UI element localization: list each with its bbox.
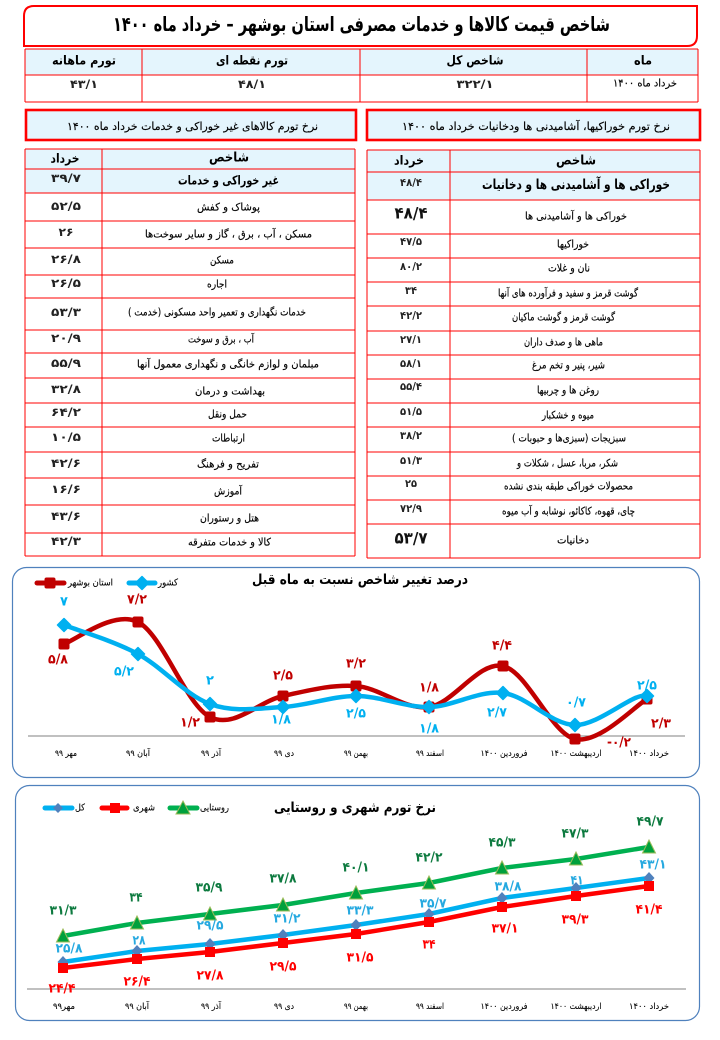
data labels: total: ۳۳/۳ (346, 904, 374, 918)
x axis labels: اردیبهشت ۱۴۰۰ (550, 749, 602, 759)
table: food, beverages and tobacco: شکر، مربا، عسل ، شکلات و (516, 458, 618, 470)
table: food, beverages and tobacco: محصولات خوراکی طبقه بندی نشده (504, 480, 633, 492)
table: non-food goods and services: کالا و خدمات متفرقه (188, 536, 271, 548)
heading: non-food inflation (26, 110, 356, 140)
data labels: total: ۳۱/۲ (274, 912, 301, 926)
x axis labels: فروردین ۱۴۰۰ (481, 1002, 528, 1012)
table: food, beverages and tobacco: ۵۸/۱ (400, 358, 422, 370)
summary table: ۴۳/۱ (70, 77, 98, 91)
axis line (28, 735, 685, 737)
table: non-food goods and services: مسکن ، آب ، برق ، گاز و سایر سوخت‌ها (145, 228, 312, 240)
data labels: Bushehr province (48, 592, 671, 750)
x axis labels: آبان ۹۹ (125, 1000, 150, 1012)
data labels: rural: ۳۱/۳ (50, 904, 77, 918)
table: non-food goods and services: اجاره (207, 278, 227, 290)
data labels: urban: ۲۶/۴ (124, 974, 151, 990)
table: non-food goods and services: ۴۲/۳ (51, 534, 81, 548)
table: non-food goods and services: ۲۶/۸ (51, 252, 81, 266)
table: food, beverages and tobacco: ۴۲/۲ (400, 310, 423, 322)
data labels: rural: ۴۹/۷ (636, 814, 664, 830)
data labels: Bushehr province: ۳/۲ (346, 656, 366, 672)
data labels: country: ۱/۸ (419, 722, 439, 736)
x axis labels: خرداد ۱۴۰۰ (629, 749, 669, 759)
table: food, beverages and tobacco: نان و غلات (548, 262, 590, 274)
summary table: خرداد ماه ۱۴۰۰ (613, 78, 677, 90)
table: non-food goods and services: غیر خوراکی و خدمات (178, 172, 279, 188)
x axis labels: بهمن ۹۹ (344, 749, 368, 759)
table: food, beverages and tobacco: ۲۵ (405, 478, 418, 490)
data labels: total: ۲۸ (132, 934, 146, 948)
table: food, beverages and tobacco: ۵۱/۳ (400, 455, 423, 467)
line: total (58, 872, 654, 968)
table: food, beverages and tobacco: چای، قهوه، کاکائو، نوشابه و آب میوه (502, 504, 635, 518)
table: non-food goods and services: ۶۴/۲ (51, 405, 81, 419)
table: non-food goods and services: هتل و رستوران (200, 512, 259, 524)
data labels: Bushehr province: ۵/۸ (48, 652, 68, 668)
data labels: Bushehr province: ۴/۴ (492, 638, 512, 654)
table: non-food goods and services: خدمات نگهداری و تعمیر واحد مسکونی (خدمت ) (128, 306, 306, 318)
data labels: country: ۰/۷ (566, 696, 586, 710)
table: non-food goods and services: تفریح و فرهنگ (197, 458, 259, 470)
table: non-food goods and services: ۴۳/۶ (51, 509, 81, 523)
table: non-food goods and services: بهداشت و درمان (195, 386, 265, 398)
data labels: urban: ۴۱/۴ (636, 902, 663, 918)
chart title: نرخ تورم شهری و روستایی (274, 800, 436, 816)
line: country (58, 618, 654, 732)
x axis labels: مهر۹۹ (53, 1002, 75, 1012)
line: rural (56, 840, 656, 942)
x axis labels: آذر ۹۹ (201, 1000, 222, 1012)
table: food, beverages and tobacco: خرداد (394, 152, 424, 168)
data labels: total: ۲۹/۵ (196, 918, 224, 934)
summary table: تورم نقطه ای (216, 52, 288, 68)
table: food, beverages and tobacco: خوراکی ها و آشامیدنی ها (525, 210, 627, 222)
x axis labels: اردیبهشت ۱۴۰۰ (550, 1002, 602, 1012)
table: non-food goods and services: ۲۶ (58, 225, 74, 239)
table: non-food goods and services: ۵۳/۳ (51, 305, 81, 319)
legend: استان بوشهر (67, 578, 113, 588)
table: non-food goods and services: آموزش (214, 484, 243, 498)
table: food, beverages and tobacco: ۲۷/۱ (400, 334, 422, 346)
data labels: rural: ۴۵/۳ (488, 836, 516, 850)
data labels: country (60, 594, 657, 736)
data labels: total: ۲۵/۸ (56, 942, 83, 956)
data labels: rural: ۳۴ (130, 890, 143, 906)
heading: food inflation: نرخ تورم خوراکیها، آشامیدنی ها ودخانیات خرداد ماه ۱۴۰۰ (402, 119, 670, 133)
summary table: تورم ماهانه (52, 52, 116, 68)
x axis labels: خرداد ۱۴۰۰ (629, 1002, 669, 1012)
table: food, beverages and tobacco: روغن ها و چربیها (537, 384, 599, 396)
data labels: country: ۲/۵ (346, 706, 366, 722)
line: Bushehr province (58, 616, 652, 744)
data labels: Bushehr province: ۲/۵ (273, 668, 293, 684)
table: food, beverages and tobacco: میوه و خشکبار (541, 410, 594, 422)
data labels: country: ۲/۷ (487, 706, 507, 720)
x axis labels: فروردین ۱۴۰۰ (481, 749, 528, 759)
data labels: total: ۳۵/۷ (420, 896, 447, 912)
table: food, beverages and tobacco: سبزیجات (سبزی‌ها و حبوبات ) (512, 432, 626, 444)
data labels: rural: ۴۷/۳ (562, 826, 589, 842)
legend: کشور (157, 578, 178, 588)
table: non-food goods and services: ۵۲/۵ (51, 199, 81, 213)
data labels: urban: ۲۹/۵ (270, 960, 297, 974)
data labels: rural: ۴۰/۱ (342, 860, 370, 876)
data labels: rural: ۳۷/۸ (270, 872, 297, 886)
summary table (25, 49, 698, 102)
data labels: total (56, 858, 666, 956)
legend: روستایی (200, 802, 229, 814)
data labels: Bushehr province: ۷/۲ (127, 592, 147, 608)
data labels: rural: ۳۵/۹ (196, 880, 223, 896)
panel: urban and rural inflation line chart (16, 786, 700, 1020)
table: non-food goods and services: پوشاک و کفش (197, 202, 260, 214)
table: non-food goods and services: ۲۰/۹ (51, 331, 81, 345)
data labels: country: ۵/۲ (114, 664, 134, 680)
data labels: urban (48, 902, 663, 996)
table: food, beverages and tobacco: ۵۵/۴ (400, 381, 423, 393)
line: urban (58, 881, 654, 973)
legend (45, 801, 229, 814)
data labels: urban: ۲۴/۴ (48, 982, 76, 996)
table: non-food goods and services: مسکن (210, 254, 234, 266)
heading: non-food inflation: نرخ تورم کالاهای غیر خوراکی و خدمات خرداد ماه ۱۴۰۰ (67, 120, 318, 133)
data labels: urban: ۲۷/۸ (196, 968, 224, 984)
data labels: Bushehr province: -۰/۲ (607, 736, 631, 750)
x axis labels: اسفند ۹۹ (416, 749, 444, 759)
data labels: Bushehr province: ۱/۸ (419, 680, 439, 696)
table: food, beverages and tobacco: ۴۸/۴ (394, 204, 428, 222)
data labels: rural: ۴۲/۲ (416, 850, 443, 866)
table: food, beverages and tobacco: ۷۲/۹ (400, 503, 423, 515)
table: food, beverages and tobacco: ۴۷/۵ (400, 236, 423, 248)
table: non-food goods and services: مبلمان و لوازم خانگی و نگهداری معمول آنها (137, 358, 319, 370)
table: food, beverages and tobacco (367, 150, 700, 558)
x axis labels: آذر ۹۹ (201, 747, 222, 759)
summary table: شاخص کل (446, 52, 504, 68)
legend (37, 576, 178, 590)
data labels: total: ۴۱ (570, 874, 584, 888)
table: non-food goods and services: ۱۰/۵ (51, 430, 81, 444)
heading: food inflation (367, 110, 700, 140)
table: food, beverages and tobacco: ۸۰/۲ (400, 261, 423, 273)
table: non-food goods and services: ۱۶/۶ (51, 482, 81, 496)
x axis labels (53, 1000, 669, 1012)
table: food, beverages and tobacco: ۳۴ (405, 285, 418, 297)
title banner (24, 6, 697, 46)
table: non-food goods and services: ۵۵/۹ (51, 356, 81, 370)
table: food, beverages and tobacco: ۳۸/۲ (400, 430, 423, 442)
table: non-food goods and services: ۳۹/۷ (51, 171, 81, 185)
data labels: country: ۱/۸ (271, 712, 291, 728)
x axis labels: دی ۹۹ (274, 749, 294, 759)
table: non-food goods and services: ۴۲/۶ (51, 456, 81, 470)
data labels: country: ۲/۵ (637, 678, 657, 694)
data labels: rural (50, 814, 664, 918)
legend: کل (75, 802, 85, 814)
data labels: Bushehr province: ۲/۳ (651, 716, 671, 732)
table: food, beverages and tobacco: ماهی ها و صدف داران (524, 336, 603, 348)
x axis labels: اسفند ۹۹ (416, 1002, 444, 1012)
table: non-food goods and services: ارتباطات (212, 432, 245, 444)
summary table: ۳۲۲/۱ (456, 77, 494, 91)
table: non-food goods and services: آب ، برق و سوخت (188, 332, 255, 346)
data labels: urban: ۳۷/۱ (492, 922, 518, 936)
data labels: urban: ۳۴ (422, 938, 436, 952)
x axis labels: بهمن ۹۹ (344, 1002, 368, 1012)
data labels: country: ۷ (60, 594, 68, 610)
table: food, beverages and tobacco: گوشت قرمز و گوشت ماکیان (512, 310, 615, 324)
axis line (27, 988, 686, 990)
table: food, beverages and tobacco: ۵۱/۵ (400, 406, 423, 418)
data labels: urban: ۳۱/۵ (346, 950, 374, 966)
summary table: ۴۸/۱ (238, 77, 266, 91)
data labels: country: ۲ (206, 674, 214, 688)
data labels: Bushehr province: ۱/۲ (180, 716, 200, 730)
table: food, beverages and tobacco: خوراکی ها و آشامیدنی ها و دخانیات (482, 176, 670, 193)
table: food, beverages and tobacco: ۴۸/۴ (400, 177, 423, 189)
table: food, beverages and tobacco: گوشت قرمز و سفید و فرآورده های آنها (498, 286, 638, 300)
data labels: total: ۳۸/۸ (494, 880, 522, 894)
x axis labels: دی ۹۹ (274, 1002, 294, 1012)
x axis labels: مهر ۹۹ (55, 749, 77, 759)
data labels: total: ۴۳/۱ (640, 858, 666, 872)
table: food, beverages and tobacco: شیر، پنیر و تخم مرغ (532, 360, 605, 372)
summary table: ماه (634, 52, 652, 68)
table: food, beverages and tobacco: خوراکیها (557, 238, 589, 250)
table: non-food goods and services: ۳۲/۸ (51, 382, 81, 396)
panel: monthly index change line chart (12, 568, 700, 778)
table: non-food goods and services: ۲۶/۵ (51, 276, 81, 290)
chart title: درصد تغییر شاخص نسبت به ماه قبل (252, 572, 468, 588)
table: non-food goods and services: حمل ونقل (208, 408, 247, 420)
table: non-food goods and services: شاخص (209, 150, 249, 166)
table: non-food goods and services: خرداد (50, 150, 80, 166)
table: non-food goods and services (25, 149, 355, 556)
table: food, beverages and tobacco: دخانیات (557, 534, 589, 546)
table: food, beverages and tobacco: ۵۳/۷ (394, 528, 428, 548)
legend: شهری (133, 802, 155, 814)
table: food, beverages and tobacco: شاخص (556, 154, 596, 168)
data labels: urban: ۳۹/۳ (562, 912, 589, 928)
x axis labels (55, 747, 669, 759)
x axis labels: آبان ۹۹ (126, 747, 151, 759)
